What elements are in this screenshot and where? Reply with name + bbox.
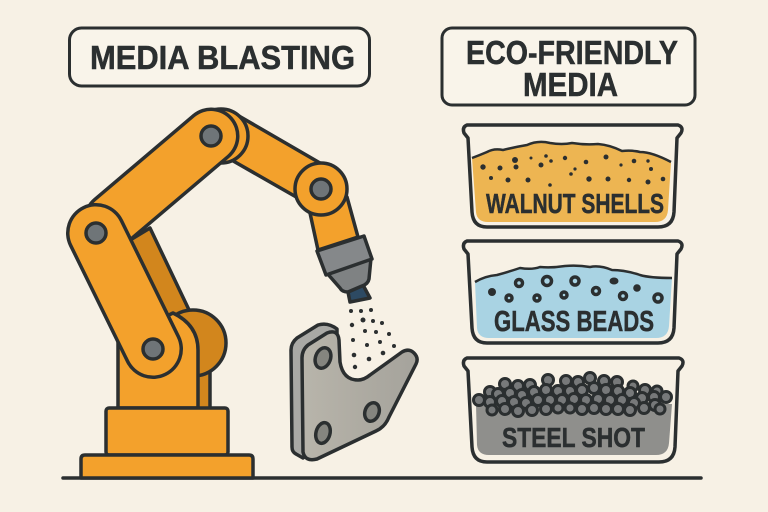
robot arm [81, 109, 372, 478]
ground line [63, 476, 701, 480]
robot base [81, 408, 253, 478]
workpiece holes [312, 346, 382, 445]
workpiece front face [302, 332, 417, 460]
panel: steel shot container [463, 358, 683, 462]
rear dark link [122, 228, 190, 335]
joint hubs [86, 126, 221, 359]
workpiece back edge [291, 324, 337, 458]
upper left arm link [112, 136, 211, 220]
label: walnut shells: WALNUT SHELLS [486, 188, 664, 219]
solid glass bead particles [488, 278, 641, 296]
glass container outline [463, 241, 682, 343]
steel fill [476, 404, 672, 455]
heading: media blasting: MEDIA BLASTING [90, 39, 355, 76]
walnut fill [472, 142, 671, 222]
steel shot pile [474, 372, 672, 416]
panel: glass beads container [463, 241, 682, 343]
steel container outline [463, 358, 683, 462]
heading: eco-friendly media: MEDIA [523, 66, 618, 103]
glass surface line [475, 266, 672, 282]
heading: eco-friendly media: ECO-FRIENDLY [466, 34, 678, 71]
wrist joint [295, 163, 347, 215]
walnut container outline [463, 125, 682, 227]
column [118, 313, 198, 408]
walnut particles [480, 154, 665, 187]
glass bead particles [506, 276, 662, 302]
forearm and nozzle [310, 197, 372, 302]
label: glass beads: GLASS BEADS [494, 306, 654, 338]
panel: walnut shells container [463, 125, 682, 227]
metal workpiece [291, 324, 417, 460]
upper right arm link [194, 109, 321, 198]
blast media spray [349, 308, 396, 369]
heading: media blasting [70, 28, 370, 86]
heading: eco-friendly media [442, 28, 695, 105]
walnut surface line [472, 142, 671, 162]
rear dark shoulder [160, 310, 226, 410]
label: steel shot: STEEL SHOT [502, 422, 645, 453]
glass fill [475, 266, 672, 338]
lower left arm link [96, 233, 153, 349]
